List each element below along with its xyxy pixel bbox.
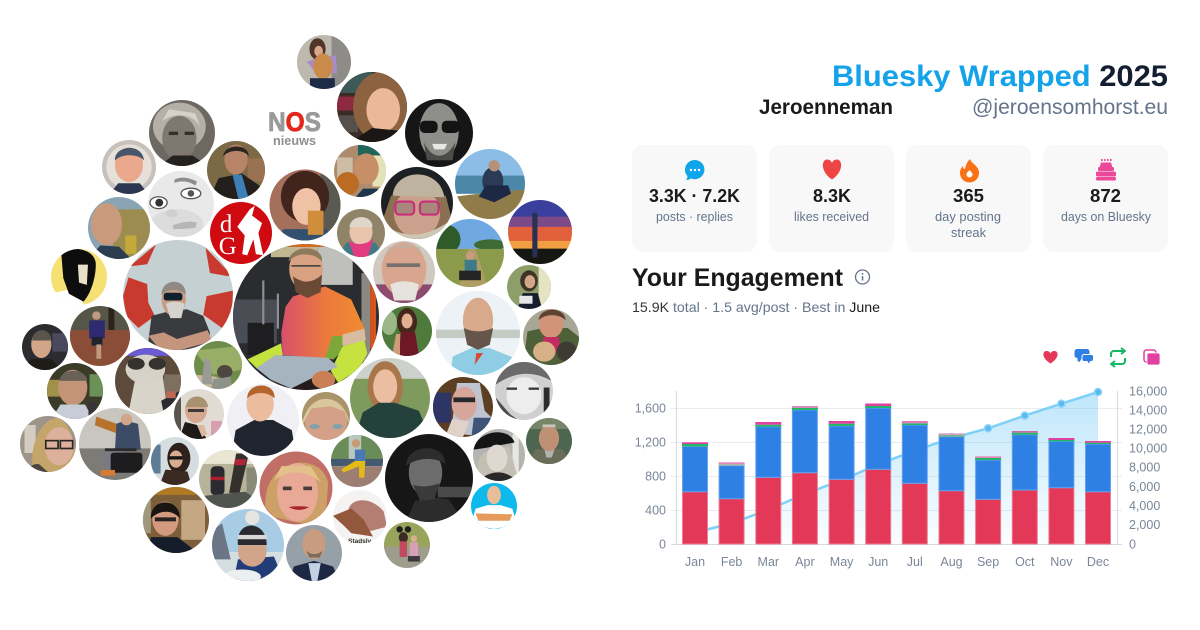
display name: Jeroenneman — [759, 96, 893, 119]
avatar: old man with white beard — [373, 241, 435, 303]
bar: Mar — [755, 422, 781, 544]
avatar: woman reading book — [507, 265, 551, 309]
panel: days on Bluesky — [1043, 145, 1168, 252]
avatar: man outdoors at table — [47, 363, 103, 419]
engagement summary: 15.9K total · 1.5 avg/post · Best in June — [632, 299, 880, 315]
avatar: man with sunglasses, monochrome — [405, 99, 473, 167]
avatar: woman selfie with glasses — [174, 389, 224, 439]
month labels: Dec — [1087, 555, 1109, 569]
avatar: hedgehog drawing: Stadslv — [348, 538, 372, 545]
avatar: woman in pink scarf — [337, 209, 385, 257]
stat value: 3.3K · 7.2K — [649, 186, 740, 206]
stat label: two lines: day posting — [935, 210, 1001, 224]
avatar: cat — [115, 348, 181, 414]
icon: heart — [823, 160, 841, 180]
avatar: bald man with beard, light blue tee — [436, 291, 520, 375]
right axis labels: 0 — [1129, 538, 1136, 552]
avatar: monochrome woman in hat — [473, 429, 525, 481]
cumulative area — [695, 392, 1098, 544]
logo: NOS nieuws: NOS — [268, 107, 321, 137]
avatar: woman in red dress — [381, 306, 432, 356]
avatar: woman in sunglasses in car — [151, 437, 199, 485]
bar: Dec — [1085, 441, 1111, 544]
bar: Nov — [1048, 438, 1074, 544]
month labels: Jul — [907, 555, 923, 569]
avatar: woman with glass — [334, 145, 386, 197]
stat label: posts · replies — [656, 210, 733, 224]
gridlines — [671, 391, 1122, 544]
right axis labels: 4,000 — [1129, 499, 1160, 513]
avatar: woman in knit hat and pink glasses — [381, 167, 453, 239]
panel: day posting streak — [906, 145, 1031, 252]
bar: May — [829, 421, 855, 544]
avatar: man in suit, grey background — [286, 525, 342, 581]
avatar: couple on coastal viewpoint — [455, 149, 525, 219]
avatar: runner in autumn forest — [70, 306, 130, 366]
avatar: man in powered wheelchair — [79, 408, 151, 480]
chart: monthly engagement stacked bars with cumulative line — [635, 384, 1167, 569]
month labels: Apr — [795, 555, 815, 569]
avatar: woman with green sweater — [350, 358, 430, 438]
right axis labels: 12,000 — [1129, 422, 1167, 436]
logo: NOS nieuws: nieuws — [273, 134, 316, 148]
icon: cake — [1096, 159, 1116, 180]
avatar: large man in orange shirt with wheelchair — [233, 244, 379, 390]
stat value: 365 — [953, 186, 984, 206]
stat value: 872 — [1090, 186, 1121, 206]
legend icons — [1043, 348, 1160, 367]
month labels: Feb — [721, 555, 742, 569]
avatar: yellow trousers dancer — [331, 435, 383, 487]
stat label: two lines: streak — [951, 226, 987, 240]
month labels — [685, 555, 1109, 569]
avatar: man among blossom trees — [88, 197, 150, 259]
icon: reply — [1074, 349, 1094, 364]
avatar: woman with glasses at bookcase — [433, 377, 493, 437]
left axis labels: 400 — [645, 504, 666, 518]
right axis labels: 16,000 — [1129, 384, 1167, 398]
left axis labels: 1,600 — [635, 402, 666, 416]
stat label: days on Bluesky — [1061, 210, 1152, 224]
avatar: curly man with glasses — [143, 487, 209, 553]
month labels: Nov — [1050, 555, 1073, 569]
month labels: Oct — [1015, 555, 1035, 569]
right axis labels: 6,000 — [1129, 480, 1160, 494]
avatar: painted portrait with ring — [102, 140, 156, 194]
icon: info — [856, 270, 870, 284]
icon: repost — [1111, 348, 1125, 367]
avatar: black and yellow portrait — [51, 249, 107, 305]
month labels: Jun — [868, 555, 888, 569]
avatar: man painted oil portrait — [207, 141, 265, 199]
heading: Your Engagement: Your Engagement — [632, 264, 844, 292]
avatar: socks on dashboard — [199, 450, 257, 508]
avatar: wheelchair on dike path — [436, 219, 504, 287]
title: Bluesky Wrapped 2025 — [832, 60, 1168, 93]
avatar: dG red logo: G — [219, 233, 237, 260]
bar: Aug — [938, 433, 964, 544]
avatar cluster — [20, 35, 579, 584]
right axis labels: 2,000 — [1129, 518, 1160, 532]
avatar: girl holding cat — [297, 35, 351, 91]
bar: Oct — [1012, 431, 1038, 544]
avatar: young man in dark zip jumper — [227, 384, 299, 456]
left axis labels — [635, 402, 666, 552]
avatar: blonde fringe, eyes close-up — [302, 392, 350, 443]
stat label: two lines — [935, 210, 1001, 240]
avatar: sunset with statue — [508, 200, 572, 264]
avatar: dG red logo — [210, 202, 272, 264]
cumulative line — [695, 392, 1098, 532]
left axis labels: 800 — [645, 470, 666, 484]
avatar: Mr. Clean — [471, 483, 517, 529]
avatar: grey-haired woman, monochrome — [149, 100, 215, 166]
avatar: woman with bookshelf — [337, 72, 409, 142]
avatar: man in winter hat, snow — [212, 509, 284, 584]
panel: likes received — [769, 145, 894, 252]
avatar: blonde woman close-up — [260, 452, 332, 524]
month labels: Jan — [685, 555, 705, 569]
handle: @jeroensomhorst.eu — [972, 96, 1168, 119]
stat value: 8.3K — [813, 186, 851, 206]
bar: Sep — [975, 456, 1001, 544]
avatar: Mickey visit with wheelchair — [384, 522, 430, 568]
icon: flame — [960, 159, 979, 182]
avatar: woman with two cats — [523, 309, 579, 365]
bar: Jul — [902, 421, 928, 544]
bar: Feb — [719, 462, 745, 544]
month labels: May — [830, 555, 854, 569]
right axis labels: 10,000 — [1129, 442, 1167, 456]
right axis labels — [1129, 384, 1167, 552]
avatar: man in green hoodie — [526, 418, 572, 464]
bar: Apr — [792, 406, 818, 544]
month labels: Sep — [977, 555, 999, 569]
icon: quote — [1144, 350, 1160, 365]
avatar: hedgehog drawing — [333, 490, 387, 545]
avatar: woman with beer, brick wall — [270, 170, 340, 240]
left axis labels: 1,200 — [635, 436, 666, 450]
avatar: sketch portrait — [495, 362, 553, 420]
right axis labels: 8,000 — [1129, 460, 1160, 474]
avatar: smiling man in dark room — [22, 324, 68, 370]
icon: chat bubble — [685, 160, 704, 180]
avatar: dG red logo: d — [220, 211, 233, 238]
right axis labels: 14,000 — [1129, 404, 1167, 418]
avatar: small creature in greenery — [194, 341, 242, 389]
avatar: man with flag, sunglasses, black tee — [123, 240, 233, 350]
month labels: Mar — [758, 555, 779, 569]
stat label: likes received — [794, 210, 869, 224]
left axis labels: 0 — [659, 538, 666, 552]
icon: like — [1043, 351, 1058, 364]
avatar: monochrome bearded man — [385, 434, 473, 522]
month labels: Aug — [940, 555, 963, 569]
panel: posts and replies — [632, 145, 757, 252]
avatar: blonde woman with glasses selfie — [20, 416, 76, 472]
avatar: memoji grey face — [148, 171, 214, 238]
bar: Jan — [682, 442, 708, 544]
bar: Jun — [865, 404, 891, 544]
line markers — [948, 388, 1102, 440]
